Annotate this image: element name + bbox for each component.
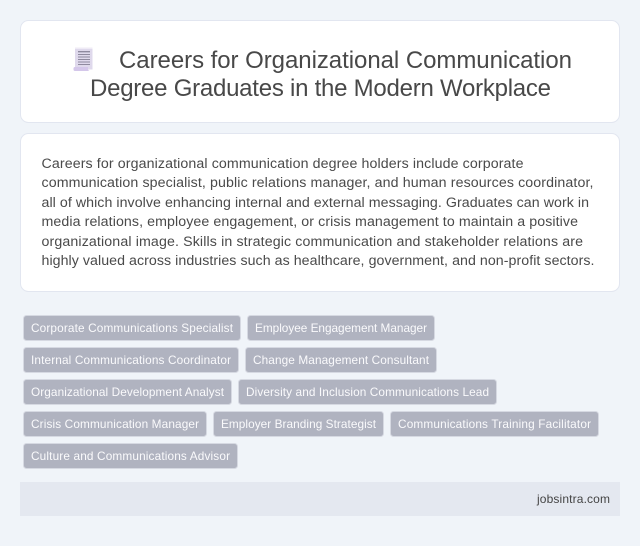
tag: Crisis Communication Manager bbox=[24, 412, 206, 436]
footer source text: jobsintra.com bbox=[536, 492, 610, 506]
tag: Employee Engagement Manager: Employee Engagement Manager bbox=[255, 321, 427, 335]
tag: Internal Communications Coordinator: Internal Communications Coordinator bbox=[31, 353, 231, 367]
tag: Employer Branding Strategist bbox=[214, 412, 384, 436]
description text: highly valued across industries such as healthcare, government, and non-profit sectors. bbox=[42, 253, 594, 269]
tag: Culture and Communications Advisor: Culture and Communications Advisor bbox=[31, 449, 230, 463]
icon: paper receipt scroll bbox=[74, 48, 92, 71]
heading: Degree Graduates in the Modern Workplace bbox=[90, 75, 551, 102]
panel: title card bbox=[20, 20, 620, 122]
tag: Culture and Communications Advisor bbox=[24, 444, 238, 468]
description text: organizational image. Skills in strategic communication and stakeholder relations are bbox=[42, 234, 583, 250]
description text: communication specialist, public relations manager, and human resources coordinator, bbox=[42, 175, 594, 191]
tag: Employee Engagement Manager bbox=[248, 316, 434, 340]
tag: Diversity and Inclusion Communications Lead bbox=[238, 380, 496, 404]
heading bbox=[90, 47, 572, 102]
heading: Careers for Organizational Communication bbox=[119, 47, 572, 74]
tag: Internal Communications Coordinator bbox=[24, 348, 238, 372]
tag: Diversity and Inclusion Communications Lead: Diversity and Inclusion Communications Lead bbox=[246, 385, 489, 399]
tag list: career titles bbox=[24, 316, 598, 468]
description text: Careers for organizational communication degree holders include corporate bbox=[42, 156, 524, 172]
tag: Organizational Development Analyst bbox=[24, 380, 232, 404]
tag: Employer Branding Strategist: Employer Branding Strategist bbox=[221, 417, 377, 431]
tag: Crisis Communication Manager: Crisis Communication Manager bbox=[31, 417, 199, 431]
tag: Corporate Communications Specialist bbox=[24, 316, 240, 340]
tag: Communications Training Facilitator bbox=[390, 412, 598, 436]
description text: media relations, employee engagement, or crisis management to maintain a positive bbox=[42, 214, 578, 230]
description text bbox=[42, 156, 594, 269]
tag: Organizational Development Analyst: Organizational Development Analyst bbox=[31, 385, 225, 399]
panel: description card bbox=[20, 134, 620, 292]
footer bar bbox=[20, 482, 620, 516]
tag: Change Management Consultant bbox=[246, 348, 436, 372]
tag: Communications Training Facilitator: Communications Training Facilitator bbox=[398, 417, 591, 431]
tag: Change Management Consultant: Change Management Consultant bbox=[253, 353, 430, 367]
description text: all of which involve enhancing internal and external messaging. Graduates can work in bbox=[42, 195, 589, 211]
tag: Corporate Communications Specialist: Corporate Communications Specialist bbox=[31, 321, 234, 335]
